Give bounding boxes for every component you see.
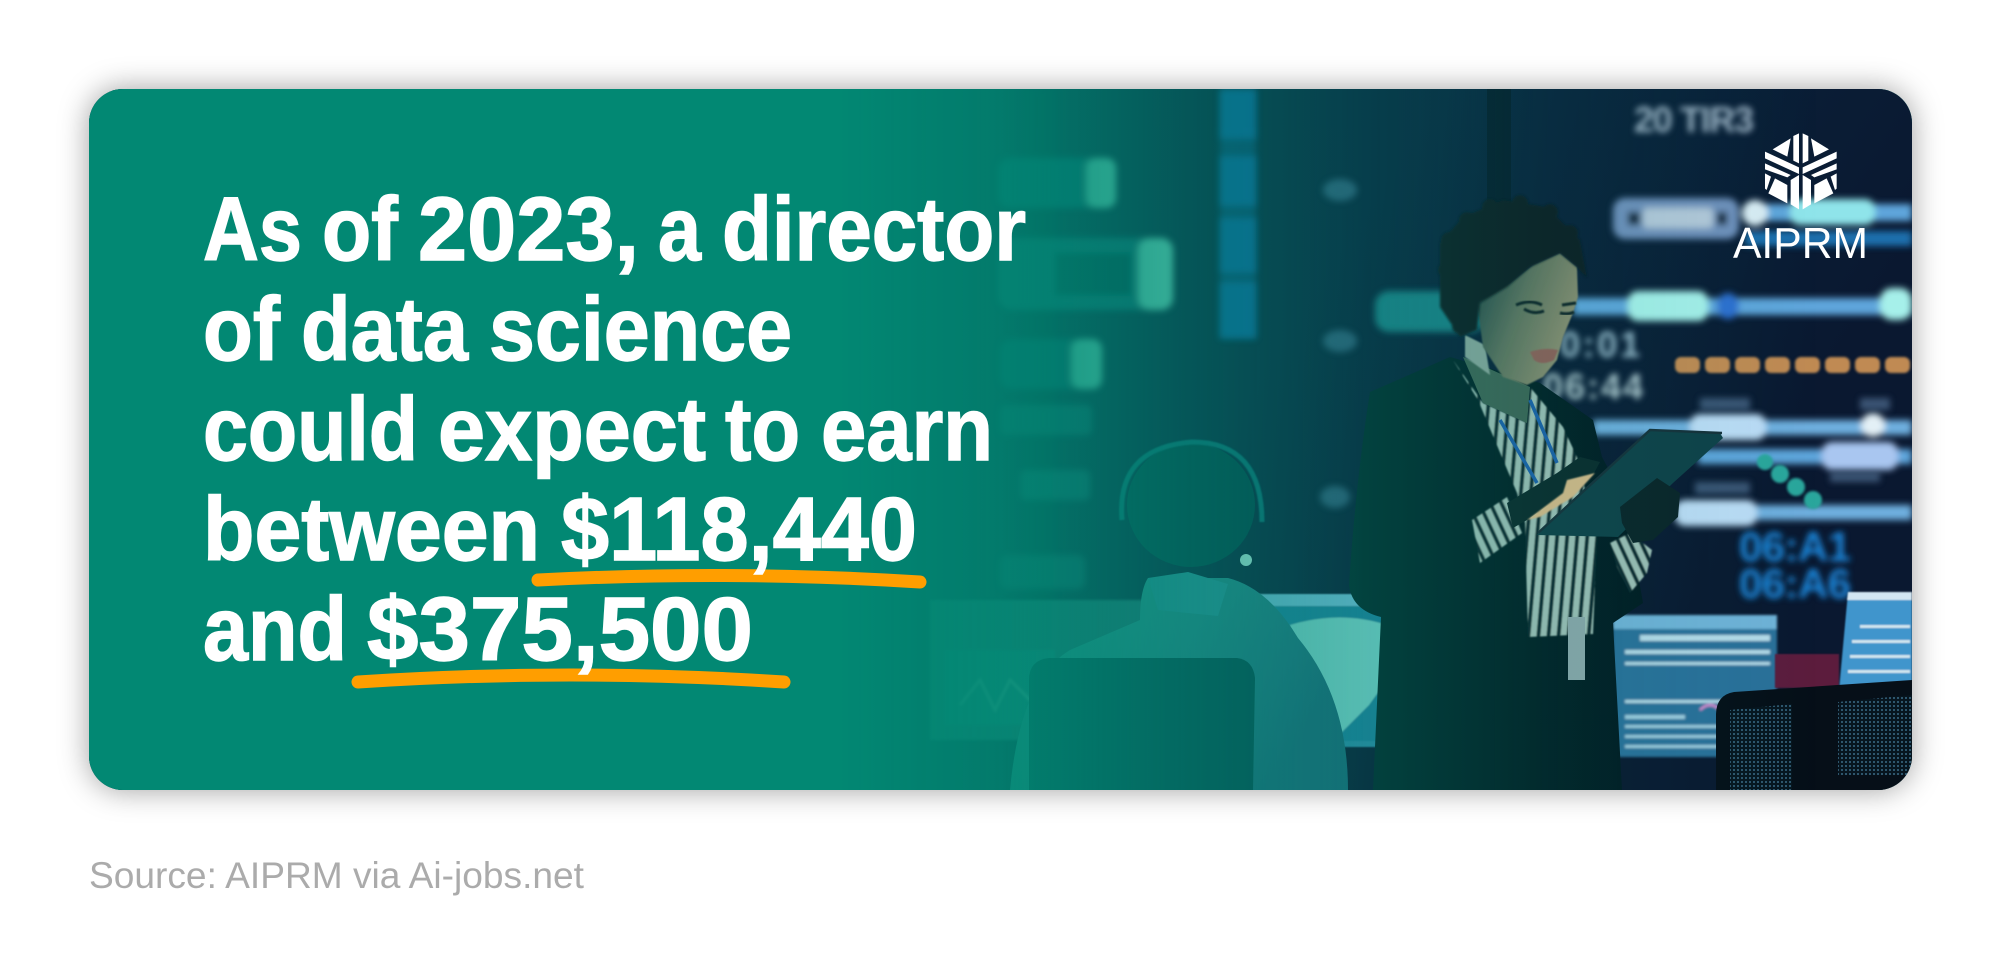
logo emblem (1765, 133, 1837, 209)
laptop screen (1839, 592, 1912, 690)
blurred wall readouts: 06:44 (1543, 366, 1643, 407)
logo wordmark: AIPRM (1733, 219, 1868, 268)
blurred wall readouts: 20 TIR3 (1634, 99, 1754, 140)
headline: earn (821, 380, 993, 480)
headline (203, 180, 1026, 680)
red indicator panel (1775, 654, 1839, 688)
headline: director (722, 180, 1026, 280)
seated man with headset (1010, 442, 1348, 790)
jacket (1349, 357, 1643, 790)
curly hair (1438, 195, 1587, 337)
teal gradient wash (89, 89, 1708, 790)
headline: science (489, 280, 792, 380)
foreground office chair (1716, 680, 1912, 790)
wall display columns (1216, 89, 1511, 342)
face (1477, 253, 1578, 385)
headline: to (725, 380, 800, 480)
headline: of (322, 180, 399, 280)
eyes and brows (1516, 302, 1576, 314)
headline: As (203, 180, 302, 280)
headline: could (203, 380, 418, 480)
teal diagonal dots (1757, 454, 1822, 509)
right monitor (1613, 615, 1777, 757)
headline: of (203, 280, 281, 380)
tablet edge (1538, 430, 1722, 533)
headline: and (203, 580, 347, 680)
headline: $118,440 (561, 480, 917, 580)
blurred wall readouts: 06:A6 (1739, 560, 1851, 607)
card shadow panel (89, 89, 1912, 790)
map monitor (1260, 593, 1381, 748)
headline: data (301, 280, 469, 380)
AIPRM logo (1733, 133, 1868, 268)
orange underline one (538, 575, 920, 582)
source note: Source: AIPRM via Ai-jobs.net (89, 855, 585, 896)
left desk monitors (945, 599, 1141, 740)
woman with tablet (1349, 195, 1723, 790)
shirt (1453, 360, 1597, 637)
holding hand (1620, 478, 1680, 543)
blurred wall readouts: 06:A1 (1739, 523, 1851, 570)
photo: control room scene with teal wash (89, 89, 1912, 790)
lips (1530, 349, 1558, 363)
glowing data bars (1375, 198, 1912, 526)
blurred left screen panels (998, 158, 1357, 589)
headline: a (658, 180, 702, 280)
blurred wall readouts (1543, 99, 1890, 607)
main illustration canvas (89, 89, 1912, 896)
blurred wall readouts: 0:01 (1560, 324, 1640, 365)
touching hand (1507, 457, 1600, 528)
headline: between (203, 480, 540, 580)
orange indicator dots (1675, 357, 1910, 373)
shirt sleeve (1472, 497, 1522, 563)
lit palm (1527, 473, 1595, 520)
headline: expect (438, 380, 706, 480)
orange underline two (358, 675, 784, 682)
headline: 2023, (418, 180, 639, 280)
headline: $375,500 (367, 580, 753, 680)
right cuff (1610, 533, 1652, 593)
neck (1463, 357, 1530, 423)
badge (1568, 617, 1585, 680)
lanyard (1500, 400, 1557, 483)
tablet (1537, 430, 1723, 537)
lit neck highlight (1465, 335, 1490, 375)
